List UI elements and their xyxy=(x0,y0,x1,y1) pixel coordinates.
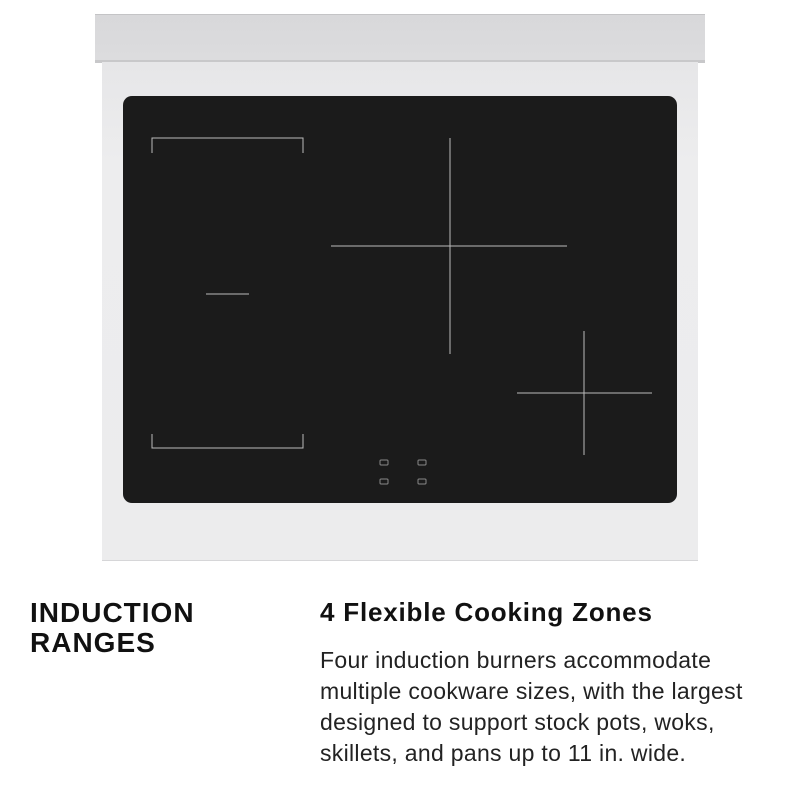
feature description xyxy=(320,647,743,766)
feature title: 4 Flexible Cooking Zones xyxy=(320,597,653,627)
heading: induction ranges: INDUCTION xyxy=(30,597,195,628)
feature description: skillets, and pans up to 11 in. wide. xyxy=(320,740,686,766)
backguard cap xyxy=(95,14,705,63)
cooktop glass xyxy=(123,96,677,503)
feature description: multiple cookware sizes, with the largest xyxy=(320,678,743,704)
feature description: Four induction burners accommodate xyxy=(320,647,711,673)
body xyxy=(102,62,698,561)
heading: induction ranges: RANGES xyxy=(30,627,156,658)
range illustration xyxy=(95,14,705,561)
feature description: designed to support stock pots, woks, xyxy=(320,709,715,735)
heading: induction ranges xyxy=(30,597,195,658)
